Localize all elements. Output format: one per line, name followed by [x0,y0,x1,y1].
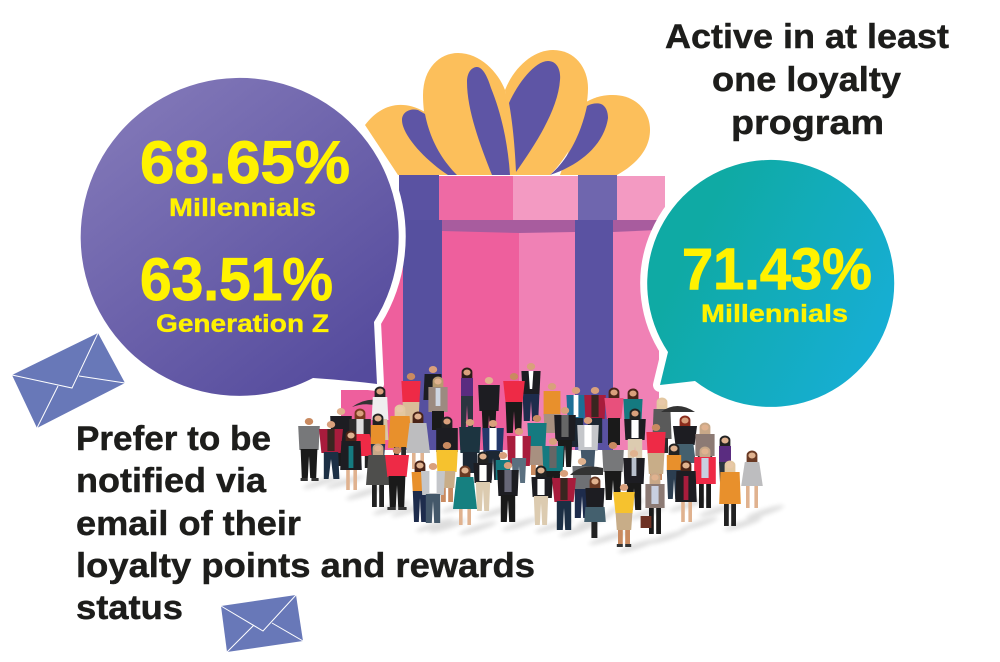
back row figures [372,363,672,453]
stat: 71.43% Millennials: Millennials [701,300,848,328]
stats: email preference [140,129,350,338]
gift lid [399,175,665,220]
umbrella left [352,400,378,407]
text block: email notification preference: status [76,589,183,627]
middle row figures [298,404,763,510]
stat: 63.51% Generation Z: Generation Z [156,310,329,338]
stat: 68.65% Millennials: Millennials [169,194,316,222]
crowd of people [298,363,785,555]
stat: 63.51% Generation Z: 63.51% [140,246,333,313]
stat: 71.43% Millennials: 71.43% [682,237,872,302]
gift body [341,220,659,450]
front row figures [412,452,741,547]
text block: email notification preference: Prefer to be [76,420,271,458]
gift box [341,50,665,450]
speech bubble: email preference [81,78,399,396]
speech bubble: loyalty program [647,160,894,407]
text block: email notification preference: notified via [76,462,267,500]
crowd shadows [302,473,785,555]
gift bow [365,50,650,175]
heading: active in loyalty program: Active in at least [665,18,949,56]
umbrella centre [570,467,603,475]
text block: email notification preference: email of their [76,505,301,543]
stat: 68.65% Millennials: 68.65% [140,129,350,196]
umbrella right [661,406,695,412]
stat: 71.43% Millennials [682,237,872,328]
heading: active in loyalty program [665,18,949,142]
heading: active in loyalty program: program [731,104,884,142]
stat: 68.65% Millennials [140,129,350,222]
text block: email notification preference: loyalty points and rewards [76,547,535,585]
icon: envelope upper left [12,333,125,428]
text block: email notification preference [76,420,535,627]
heading: active in loyalty program: one loyalty [712,61,901,99]
icon: envelope bottom [221,595,303,652]
